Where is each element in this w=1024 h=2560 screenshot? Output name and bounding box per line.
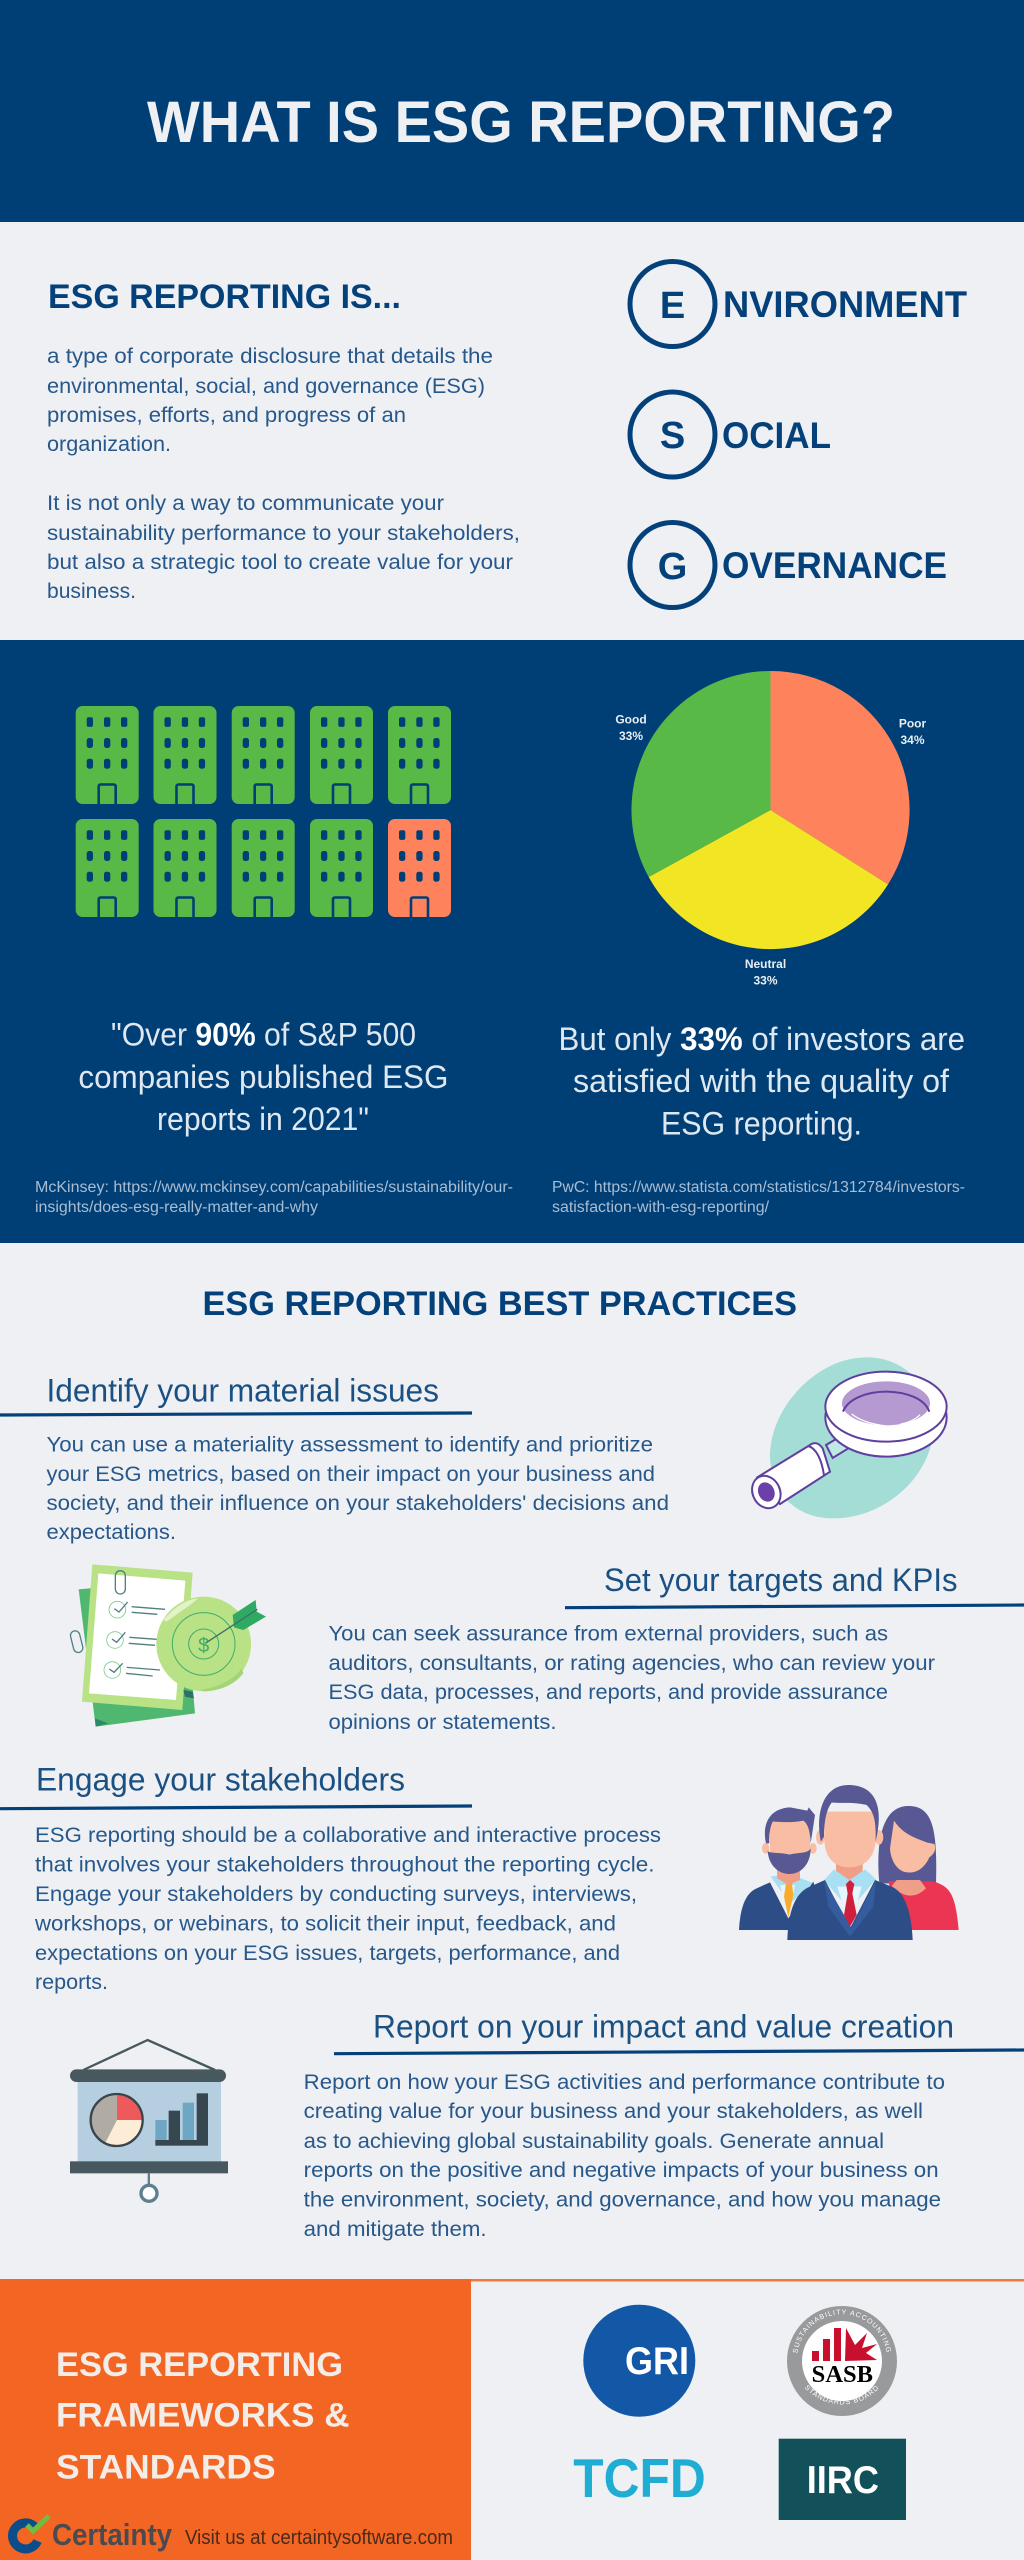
text block: definition paragraph one	[47, 345, 493, 456]
icon: checklist and target	[69, 1564, 266, 1727]
heading: frameworks and standards: FRAMEWORKS &	[56, 2397, 350, 2435]
text block: materiality	[46, 1434, 669, 1544]
text block: assurance	[328, 1623, 935, 1734]
text block: engagement: ESG reporting should be a collaborative and interactive process	[35, 1824, 661, 1847]
text block: reporting impact: and mitigate them.	[304, 2218, 487, 2241]
text block: reporting impact: reports on the positive and negative impacts of your business on	[304, 2159, 939, 2182]
pie label: poor: 34%	[900, 733, 925, 747]
text block: reporting impact: the environment, society, and governance, and how you manage	[304, 2189, 941, 2212]
stat text: S&P 500 companies: "Over 90% of S&P 500	[111, 1017, 416, 1053]
pie chart: investor satisfaction	[615, 671, 926, 988]
logo: IIRC: IIRC	[807, 2459, 879, 2502]
icon: checklist and target: $	[198, 1635, 209, 1657]
text block: assurance: opinions or statements.	[328, 1711, 556, 1734]
ESG acronym: governance: G	[658, 546, 687, 588]
source: PwC: satisfaction-with-esg-reporting/	[552, 1199, 770, 1216]
heading: ESG reporting is: ESG REPORTING IS...	[48, 278, 401, 316]
pie label: poor	[899, 716, 926, 747]
pie label: neutral: Neutral	[745, 957, 786, 971]
ESG acronym: social: OCIAL	[722, 415, 831, 456]
text block: definition paragraph two: but also a strategic tool to create value for your	[47, 551, 513, 574]
text block: reporting impact: creating value for your business and your stakeholders, as well	[304, 2100, 923, 2123]
text block: materiality: You can use a materiality assessment to identify and prioritize	[46, 1434, 653, 1457]
stat text: investors satisfied: But only 33% of investors are	[558, 1021, 965, 1057]
heading: frameworks and standards: ESG REPORTING	[56, 2346, 343, 2384]
logo: TCFD: TCFD	[573, 2447, 706, 2509]
source: McKinsey	[35, 1179, 513, 1216]
logo: GRI	[583, 2305, 695, 2417]
source: PwC: PwC: https://www.statista.com/statistics/1312784/investors-	[552, 1179, 965, 1196]
text block: definition paragraph two: It is not only a way to communicate your	[47, 492, 444, 515]
stat text: investors satisfied	[558, 1021, 965, 1142]
stat text: investors satisfied: ESG reporting.	[661, 1106, 862, 1142]
pie label: good	[615, 712, 647, 743]
ESG acronym: environment: E	[660, 285, 685, 327]
text block: definition paragraph one: organization.	[47, 433, 171, 456]
subheading: identify your material issues: Identify your material issues	[46, 1373, 439, 1409]
pictogram: buildings, nine of ten green	[76, 706, 451, 917]
text block: engagement	[34, 1824, 661, 1994]
panel: statistics	[0, 640, 1024, 1243]
text block: definition paragraph two: sustainability performance to your stakeholders,	[47, 522, 520, 545]
logo: GRI: GRI	[625, 2340, 689, 2383]
practice four: impact and value creation	[70, 2009, 1024, 2241]
pie label: neutral: 33%	[753, 974, 778, 988]
text block: definition paragraph two	[47, 492, 520, 603]
logo: Certainty	[13, 2516, 173, 2552]
text block: materiality: society, and their influence on your stakeholders' decisions and	[46, 1492, 669, 1515]
icon: magnifying glass	[747, 1357, 947, 1518]
text block: materiality: your ESG metrics, based on their impact on your business and	[46, 1463, 655, 1486]
text block: engagement: workshops, or webinars, to solicit their input, feedback, and	[34, 1913, 616, 1936]
source: PwC	[552, 1179, 965, 1216]
panel: definition	[47, 262, 967, 608]
text block: definition paragraph two: business.	[47, 580, 136, 603]
panel: best practices	[0, 1285, 1024, 2241]
pie label: good: 33%	[619, 729, 643, 743]
subheading: report on your impact: Report on your impact and value creation	[373, 2009, 954, 2045]
pie label: neutral	[745, 957, 786, 988]
logo: Certainty: Certainty	[52, 2517, 173, 2552]
text block: assurance: You can seek assurance from external providers, such as	[328, 1623, 888, 1646]
link text: website: Visit us at certaintysoftware.com	[185, 2527, 453, 2549]
subheading: engage your stakeholders: Engage your stakeholders	[36, 1762, 405, 1798]
source: McKinsey: McKinsey: https://www.mckinsey.com/capabilities/sustainability/our-	[35, 1179, 513, 1196]
text block: reporting impact: Report on how your ESG activities and performance contribute to	[304, 2071, 945, 2094]
text block: engagement: that involves your stakeholders throughout the reporting cycle.	[35, 1854, 654, 1877]
heading: frameworks and standards: STANDARDS	[56, 2449, 276, 2487]
practice two: targets and KPIs	[69, 1562, 1024, 1734]
icon: three business people	[739, 1785, 959, 1940]
pie label: poor: Poor	[899, 716, 926, 730]
practice three: engage stakeholders	[0, 1762, 959, 1994]
ESG acronym: governance: OVERNANCE	[722, 545, 947, 586]
text block: engagement: Engage your stakeholders by conducting surveys, interviews,	[35, 1883, 637, 1906]
logo: SASB	[787, 2306, 897, 2416]
practice one: identify material issues	[0, 1357, 947, 1544]
logo: SASB: SASB	[812, 2362, 873, 2388]
text block: assurance: ESG data, processes, and reports, and provide assurance	[328, 1681, 888, 1704]
ESG acronym: governance	[630, 522, 947, 608]
panel: header	[0, 0, 1024, 222]
panel: frameworks and standards	[0, 2279, 1024, 2560]
text block: assurance: auditors, consultants, or rating agencies, who can review your	[328, 1652, 935, 1675]
subheading: set your targets and KPIs: Set your targets and KPIs	[604, 1562, 958, 1598]
text block: definition paragraph one: a type of corporate disclosure that details the	[47, 345, 493, 368]
logo: IIRC	[779, 2439, 906, 2520]
ESG acronym: social	[630, 392, 831, 477]
stat text: S&P 500 companies: reports in 2021"	[157, 1101, 369, 1137]
pie label: good: Good	[615, 712, 647, 726]
ESG acronym: social: S	[660, 415, 685, 457]
text block: engagement: reports.	[35, 1971, 108, 1994]
text block: definition paragraph one: environmental, social, and governance (ESG)	[47, 375, 485, 398]
stat text: S&P 500 companies: companies published ESG	[78, 1059, 448, 1095]
heading: frameworks and standards	[56, 2346, 350, 2487]
title: WHAT IS ESG REPORTING?	[147, 90, 895, 155]
ESG acronym: environment	[630, 262, 967, 346]
icon: presentation board	[70, 2040, 228, 2201]
text block: engagement: expectations on your ESG issues, targets, performance, and	[35, 1942, 620, 1965]
ESG acronym: environment: NVIRONMENT	[723, 284, 967, 325]
stat text: S&P 500 companies	[78, 1017, 448, 1137]
text block: reporting impact: as to achieving global sustainability goals. Generate annual	[304, 2130, 884, 2153]
stat text: investors satisfied: satisfied with the quality of	[573, 1063, 949, 1099]
source: McKinsey: insights/does-esg-really-matter-and-why	[35, 1199, 318, 1216]
text block: reporting impact	[304, 2071, 945, 2241]
logo: SASB: SUSTAINABILITY ACCOUNTING	[792, 2310, 891, 2354]
text block: definition paragraph one: promises, efforts, and progress of an	[47, 404, 406, 427]
logo: SASB: STANDARDS BOARD	[805, 2385, 878, 2404]
text block: materiality: expectations.	[46, 1521, 176, 1544]
panel: orange footer block	[0, 2279, 471, 2560]
heading: best practices: ESG REPORTING BEST PRACTICES	[202, 1285, 797, 1323]
